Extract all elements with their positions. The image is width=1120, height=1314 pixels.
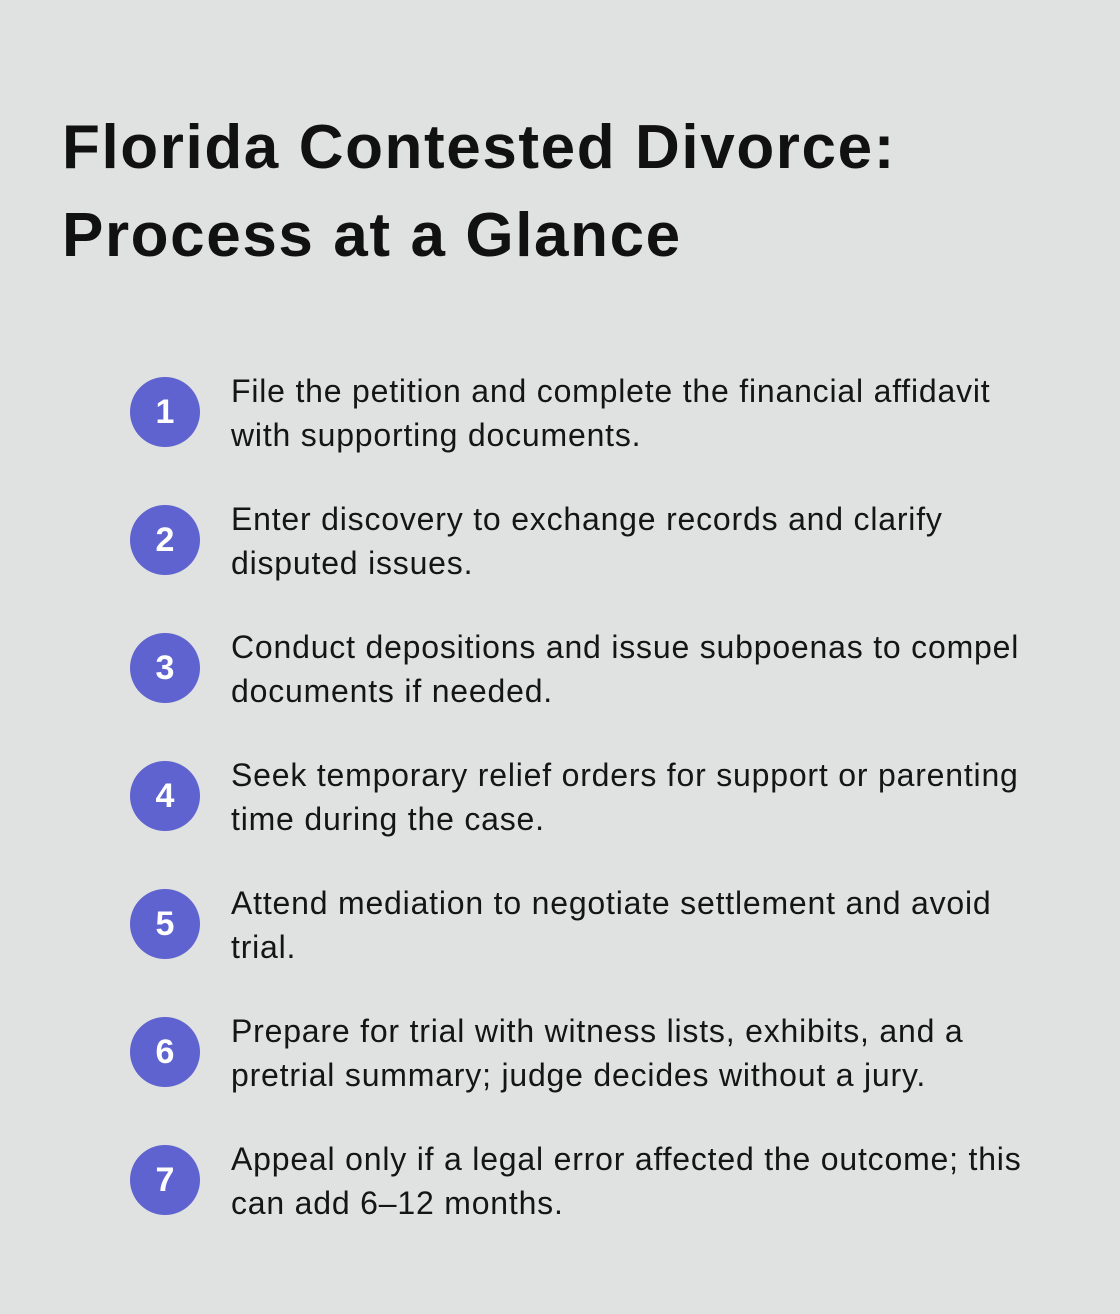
step 6: pretrial summary; judge decides without a jury. [231, 1057, 926, 1093]
step 4: 4 [156, 777, 174, 815]
step 1: 1 [156, 393, 174, 431]
step 1: with supporting documents. [231, 417, 641, 453]
step 5: Attend mediation to negotiate settlement and avoid [231, 885, 991, 921]
step 5: 5 [156, 905, 174, 943]
step 2: disputed issues. [231, 545, 473, 581]
step 2 [130, 501, 943, 581]
step 6: 6 [156, 1033, 174, 1071]
step 2: 2 [156, 521, 174, 559]
title: Process at a Glance [62, 201, 682, 270]
step 6 [130, 1013, 963, 1093]
step 3: documents if needed. [231, 673, 553, 709]
title: Florida Contested Divorce: [62, 113, 896, 182]
step 7 [130, 1141, 1022, 1221]
step 4: Seek temporary relief orders for support or parenting [231, 757, 1019, 793]
title [62, 113, 896, 270]
step 5 [130, 885, 991, 965]
step 1 [130, 373, 990, 453]
step 6: Prepare for trial with witness lists, exhibits, and a [231, 1013, 963, 1049]
step 4: time during the case. [231, 801, 545, 837]
step 3: Conduct depositions and issue subpoenas to compel [231, 629, 1019, 665]
step 3 [130, 629, 1019, 709]
step 7: Appeal only if a legal error affected the outcome; this [231, 1141, 1022, 1177]
step 2: Enter discovery to exchange records and clarify [231, 501, 943, 537]
step 7: can add 6–12 months. [231, 1185, 564, 1221]
step 4 [130, 757, 1019, 837]
step 7: 7 [156, 1161, 174, 1199]
step 1: File the petition and complete the financial affidavit [231, 373, 990, 409]
step 5: trial. [231, 929, 296, 965]
step 3: 3 [156, 649, 174, 687]
